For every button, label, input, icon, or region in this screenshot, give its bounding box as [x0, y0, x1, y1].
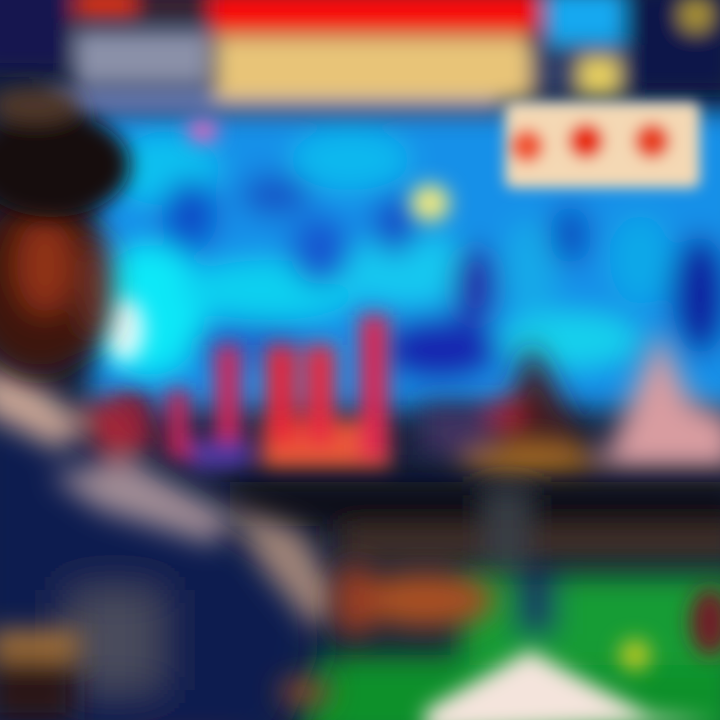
panel: top marquee — [0, 0, 720, 114]
panel: green table — [300, 575, 720, 720]
table items: chips and cards — [130, 588, 720, 720]
panel: dark band — [230, 482, 720, 580]
panel: mountains — [420, 330, 720, 478]
figure: man's shirt — [0, 400, 320, 720]
figure: man's head — [0, 195, 112, 375]
highlights on the wall — [105, 118, 450, 362]
figure: plaid collar and shoulder — [0, 360, 340, 720]
panel: blue sky wall — [90, 110, 720, 410]
figure: man's hair — [0, 87, 130, 217]
chart-like element: red towers — [115, 315, 390, 470]
figure: hands — [279, 562, 495, 704]
panel: cream sign with three red lights — [505, 102, 700, 188]
